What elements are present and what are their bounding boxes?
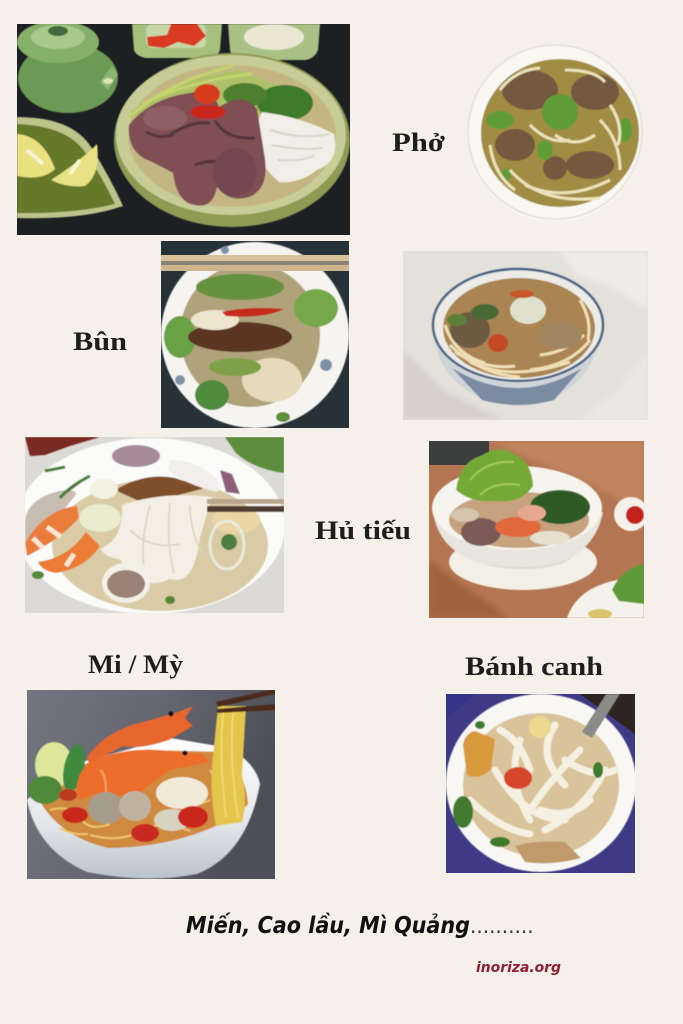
clams (88, 792, 124, 824)
noodles fill (38, 750, 248, 848)
photo: bun seafood bowl with shrimp (15, 437, 285, 614)
fish cake (212, 511, 260, 534)
heading: Bánh canh: Bánh canh (465, 652, 604, 681)
beef (129, 92, 266, 206)
main bowl (114, 53, 350, 227)
noodles lift (100, 495, 212, 583)
herbs (453, 721, 603, 847)
side salad top right (225, 437, 284, 473)
footer: website credit: inoriza.org (476, 960, 561, 976)
chopsticks (161, 255, 349, 271)
pork (117, 476, 204, 501)
heading: Mi / Mỳ: Mi / Mỳ (88, 650, 183, 679)
photo: hu tieu bowl on wooden table (429, 441, 648, 619)
lettuce (456, 449, 533, 501)
thick noodles (470, 725, 615, 834)
clam shell (25, 490, 76, 546)
photo: pho bowl with beef, teapot and limes (17, 21, 350, 235)
heading: Bûn: Bûn (73, 327, 128, 356)
prawns (87, 706, 193, 764)
scallion rings (210, 521, 244, 569)
lifted noodles (212, 706, 246, 826)
icon: green teapot (17, 21, 118, 113)
white bowl (27, 738, 260, 879)
spoon (582, 694, 620, 738)
chopsticks (207, 499, 284, 504)
chopsticks (216, 689, 275, 707)
small dish of chili (132, 24, 222, 58)
dark herbs (530, 490, 590, 524)
noodles (445, 300, 590, 377)
saucer (448, 546, 598, 591)
white bowl (15, 438, 285, 614)
green herbs (486, 94, 632, 181)
beef slices (495, 70, 619, 180)
photo: pho in white bowl (467, 44, 643, 222)
quail eggs (79, 504, 121, 532)
footer: other noodle names: Miến, Cao lầu, Mì Quảng.......... (186, 912, 534, 939)
herbs (128, 66, 313, 121)
fish cake (463, 731, 495, 777)
sauce dish (614, 497, 648, 531)
photo: bun plate (161, 241, 349, 428)
noodles (490, 68, 620, 199)
heading: Hủ tiếu: Hủ tiếu (315, 516, 411, 545)
white bowl (446, 694, 636, 872)
photo: noodle soup in blue-rim bowl on linen (403, 251, 648, 420)
meat and shrimp (461, 518, 501, 546)
bowl (433, 512, 603, 567)
meatball ring (102, 563, 150, 603)
side dish top left (25, 437, 100, 456)
bowl (434, 341, 596, 395)
lime plate (17, 117, 123, 218)
photo: banh canh bowl (446, 694, 636, 873)
plate blue pattern (175, 246, 334, 385)
small dish of onion (228, 24, 320, 60)
corn / squid (156, 777, 208, 809)
lime (35, 742, 73, 788)
side plate (567, 576, 644, 618)
salad toppings (164, 263, 338, 422)
chili slices (194, 84, 220, 104)
sliced onion (249, 112, 335, 182)
shrimp (25, 506, 79, 556)
chili slices (62, 807, 88, 823)
onion purple (112, 445, 160, 467)
heading: Phở: Phở (392, 128, 446, 157)
photo: mi bowl with prawns (27, 689, 275, 879)
